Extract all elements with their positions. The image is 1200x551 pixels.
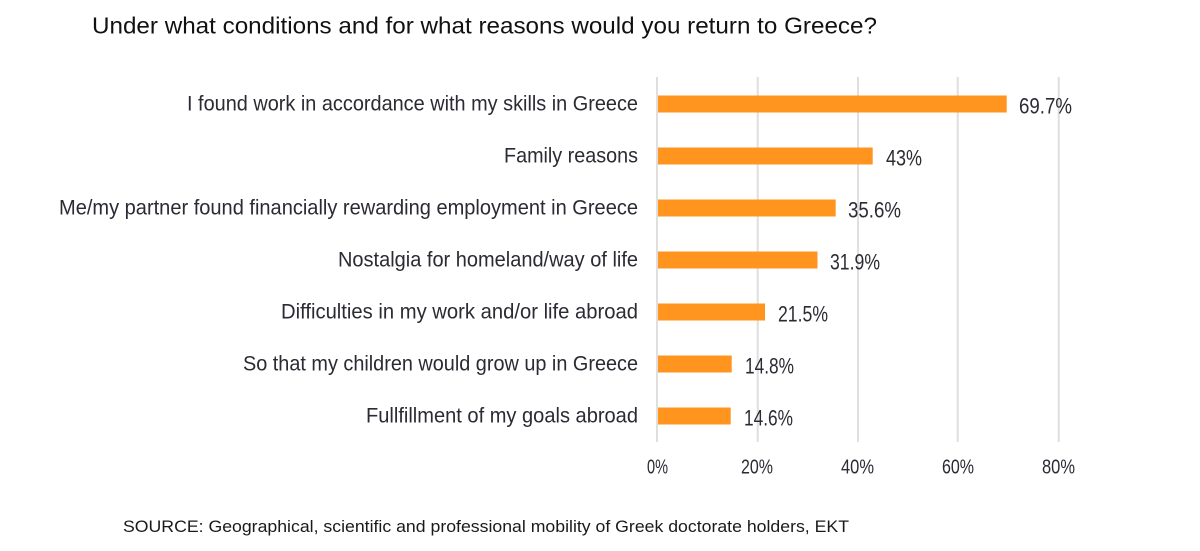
x axis labels: 20%: [741, 456, 773, 478]
bars: [658, 96, 1007, 424]
category labels: So that my children would grow up in Greece: [243, 352, 638, 376]
bar chart: [59, 77, 1075, 478]
category labels: Fullfillment of my goals abroad: [366, 404, 638, 428]
value labels: 21.5%: [778, 302, 828, 326]
value labels: 43%: [886, 146, 922, 170]
value labels: 14.6%: [744, 406, 793, 430]
x axis labels: 0%: [647, 456, 668, 478]
x axis labels: 60%: [942, 456, 974, 478]
x axis labels: [647, 456, 1075, 478]
category labels: Nostalgia for homeland/way of life: [338, 248, 638, 272]
category labels: [59, 92, 638, 428]
category labels: Difficulties in my work and/or life abroad: [281, 300, 638, 324]
value labels: 31.9%: [830, 250, 880, 274]
title: Under what conditions and for what reasons would you return to Greece?: [92, 12, 877, 38]
x axis labels: 80%: [1042, 456, 1075, 478]
category labels: Family reasons: [504, 144, 638, 168]
category labels: Me/my partner found financially rewarding employment in Greece: [59, 196, 638, 220]
x axis labels: 40%: [841, 456, 874, 478]
source note: SOURCE: Geographical, scientific and professional mobility of Greek doctorate holders, EKT: [123, 517, 849, 536]
value labels: 35.6%: [848, 198, 901, 222]
value labels: [744, 94, 1072, 430]
value labels: 14.8%: [745, 354, 794, 378]
value labels: 69.7%: [1019, 94, 1072, 118]
category labels: I found work in accordance with my skills in Greece: [187, 92, 638, 116]
